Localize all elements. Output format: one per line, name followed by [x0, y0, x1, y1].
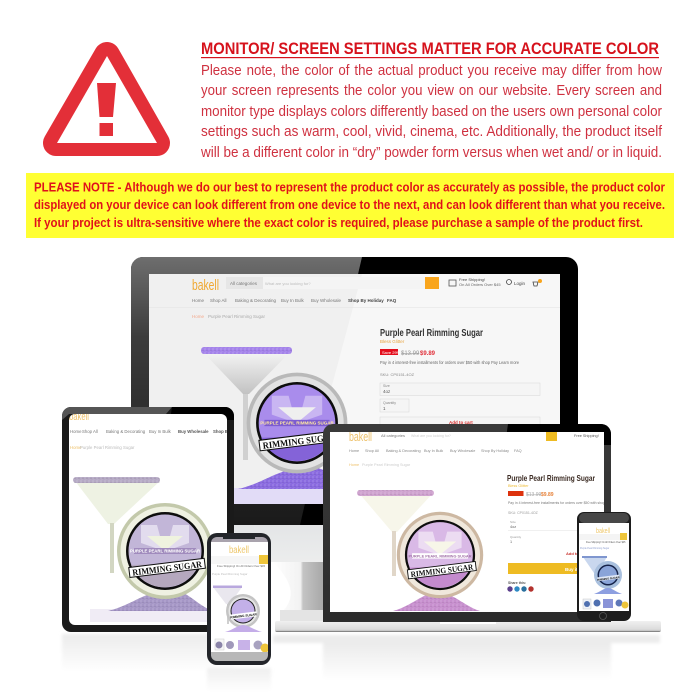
site header: On All Orders Over $45 [459, 282, 501, 287]
site header: Free Shipping! [459, 277, 485, 282]
callout: please note: If your project is ultra-sensitive where the exact color is required, please purchase a sample of the product first. [34, 216, 643, 230]
laptop screen: Free Shipping! [574, 434, 599, 438]
laptop screen: What are you looking for? [411, 434, 451, 438]
site nav: Buy In Bulk [281, 298, 305, 303]
laptop nav: Purple Pearl Rimming Sugar [362, 463, 411, 467]
tablet nav: Baking & Decorating [106, 429, 146, 434]
laptop product details: Buy it now [565, 567, 588, 572]
laptop product details: Pay in 4 interest-free installments for orders over $50 with shop [508, 501, 605, 505]
tablet nav: Home [70, 429, 82, 434]
phone product: sugar pile [594, 588, 622, 594]
site nav: Baking & Decorating [235, 298, 277, 303]
tablet nav: Shop By [213, 429, 231, 434]
laptop product: tin: PURPLE PEARL RIMMING SUGAR [409, 553, 472, 558]
phone home button [600, 612, 606, 620]
laptop product details: Add to cart [566, 551, 588, 556]
phone product: martini glass [214, 588, 241, 604]
laptop product details: Size [510, 520, 516, 524]
laptop product details: 4oz [510, 525, 516, 529]
laptop product details: $9.89 [541, 492, 554, 498]
monitor stand [273, 562, 330, 622]
product details: 1 [383, 406, 386, 411]
phone: left [207, 533, 271, 665]
laptop product details: Share this: [508, 581, 526, 585]
laptop nav: Shop By Holiday [481, 449, 509, 453]
site nav: Home [192, 298, 205, 303]
site header: bakell [192, 277, 219, 294]
site nav: Home [192, 314, 205, 319]
laptop product details: $13.99 [526, 492, 542, 498]
product details: Add to cart [449, 420, 473, 425]
text block: color note: will be a different color in “dry” powder form versus when wet and/ or in liquid. [200, 144, 662, 161]
laptop [275, 424, 661, 632]
laptop nav: Baking & Decorating [386, 449, 421, 453]
site header: What are you looking for? [265, 281, 311, 286]
laptop product: tin: RIMMING SUGAR [410, 563, 474, 579]
laptop product: tin [397, 512, 483, 598]
tablet nav: Shop All [82, 429, 98, 434]
site nav: FAQ [387, 298, 397, 303]
product details: SKU: CP0151-4OZ [380, 372, 415, 377]
laptop nav: Buy In Bulk [424, 449, 443, 453]
callout: please note [26, 173, 674, 238]
tablet product: sugar pile [90, 594, 207, 622]
site header: Login [514, 281, 526, 286]
phone product: tin: RIMMING SUGAR [597, 575, 620, 582]
laptop nav [349, 449, 522, 467]
product details: Save 29% [382, 350, 401, 355]
product: tin [247, 373, 347, 473]
laptop product: sugar pile [393, 596, 480, 611]
laptop product details: 1 [510, 540, 512, 544]
tablet nav: Purple Pearl Rimming Sugar [80, 445, 135, 450]
product details: $13.99 [401, 351, 420, 357]
product details: Purple Pearl Rimming Sugar [380, 328, 483, 339]
phone: left: Free Shipping! On All Orders Over $45 [217, 564, 265, 568]
tablet product: martini glass [73, 477, 160, 573]
laptop screen: bakell [349, 429, 372, 444]
laptop product details: Purple Pearl Rimming Sugar [507, 473, 596, 483]
product details: Pay in 4 interest-free installments for orders over $50 with shop Pay Learn more [380, 360, 520, 365]
laptop product details: SKU: CP0151-4OZ [508, 511, 539, 515]
product: tin: PURPLE PEARL RIMMING SUGAR [260, 421, 334, 426]
icon: warning triangle [56, 55, 157, 143]
laptop nav: Home [349, 449, 359, 453]
phone thumbnails [583, 599, 628, 609]
site nav: Purple Pearl Rimming Sugar [208, 314, 266, 319]
reflection under devices [62, 634, 660, 692]
laptop nav: Buy Wholesale [450, 449, 475, 453]
monitor screen [149, 274, 560, 504]
laptop product: martini glass [357, 490, 434, 576]
laptop base [275, 621, 661, 632]
monitor chin [234, 520, 578, 562]
laptop product details: Bless Glitter [508, 484, 529, 488]
phone: right [577, 512, 631, 621]
phone: left: Purple Pearl Rimming Sugar [212, 572, 248, 576]
product details: Quantity [383, 401, 396, 405]
site nav: Shop By Holiday [348, 298, 384, 303]
tablet [62, 407, 234, 632]
tablet product: tin [117, 503, 213, 599]
site nav: Shop All [210, 298, 227, 303]
tablet screen [69, 411, 231, 625]
product details: 4oz [383, 389, 391, 394]
text block: color note: settings such as warm, cool, vivid, cinema, etc. Additionally, the product itself [201, 123, 663, 140]
monitor bezel [131, 257, 578, 525]
phone product: tin: RIMMING SUGAR [230, 612, 258, 620]
laptop product details: Quantity [510, 535, 522, 539]
phone: left: bakell [229, 545, 249, 556]
tablet nav: Buy In Bulk [149, 429, 172, 434]
laptop product details [507, 473, 605, 592]
tablet nav: Home [70, 445, 82, 450]
phone thumbnails [215, 639, 270, 652]
phone: right: Purple Pearl Rimming Sugar [580, 547, 609, 550]
laptop screen: All categories [381, 433, 405, 438]
phone product: sugar pile [225, 625, 262, 632]
laptop nav: Shop All [365, 449, 379, 453]
tablet nav [70, 429, 231, 450]
tablet bezel [62, 407, 234, 632]
laptop screen [330, 429, 605, 612]
laptop nav: FAQ [514, 449, 522, 453]
tablet product: tin: RIMMING SUGAR [132, 559, 203, 578]
laptop nav: Home [349, 463, 359, 467]
tablet product: tin: PURPLE PEARL RIMMING SUGAR [130, 548, 201, 554]
product: tin: RIMMING SUGAR [262, 433, 337, 452]
product details: $9.89 [420, 351, 436, 357]
phone product: martini glass [584, 558, 606, 573]
text block: color note [200, 62, 663, 161]
phone: right: bakell [596, 526, 610, 535]
laptop bezel [323, 424, 611, 622]
product details: Size [383, 384, 390, 388]
product details [380, 328, 540, 431]
tablet nav: Buy Wholesale [178, 429, 209, 434]
tablet screen: bakell [69, 411, 89, 423]
site header [192, 277, 542, 290]
monitor [131, 257, 578, 622]
product details: Bless Glitter [380, 339, 405, 344]
site nav [149, 298, 560, 319]
product: sugar pile [234, 468, 323, 504]
site nav: Buy Wholesale [311, 298, 342, 303]
site header: All categories [230, 281, 258, 286]
product: martini glass [201, 347, 292, 460]
phone: right: Free Shipping! On All Orders Over $45 [586, 541, 626, 544]
